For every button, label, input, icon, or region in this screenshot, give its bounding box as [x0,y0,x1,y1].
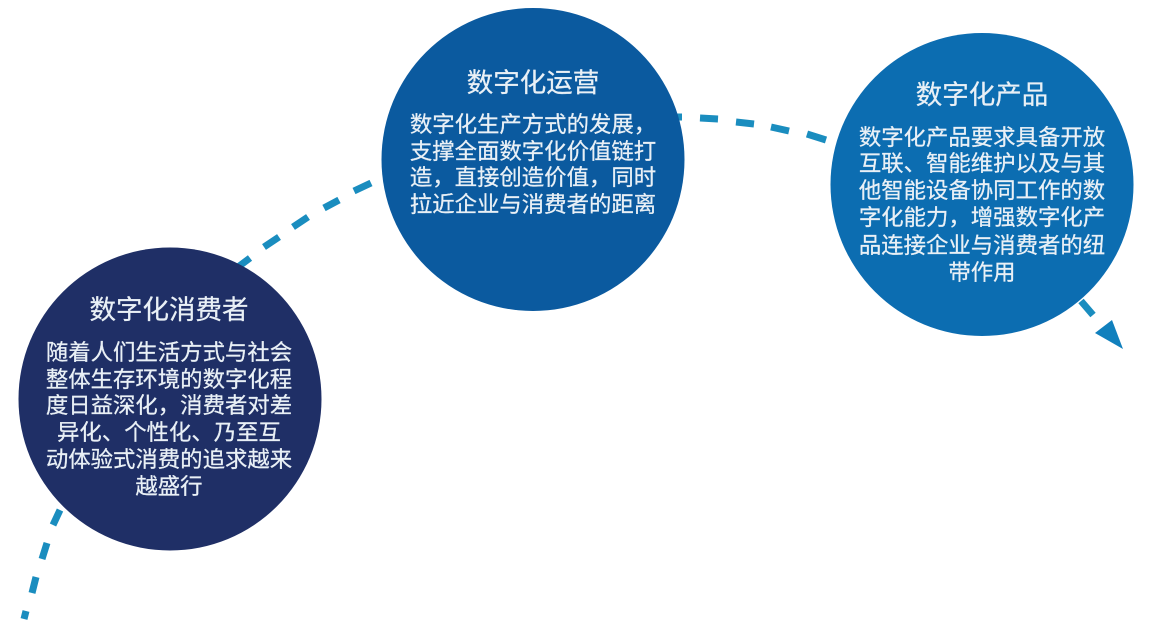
text block: digital consumer description: 异化、个性化、乃至互 [57,420,281,445]
arrow: dashed entry below consumer circle [24,510,60,619]
panel: digital product circle [830,33,1134,336]
text block: digital product description: 数字化产品要求具备开放 [859,125,1105,150]
text block: digital product description: 互联、智能维护以及与其 [859,151,1105,176]
arrow: dashed exit with arrowhead [1081,301,1123,349]
panel: digital operations circle [382,8,684,311]
text block: digital product description: 字化能力，增强数字化产 [859,205,1105,230]
text block: digital consumer description: 越盛行 [135,474,203,499]
text block: digital consumer description: 度日益深化，消费者对差 [46,393,292,418]
text block: digital consumer description: 整体生存环境的数字化程 [46,367,292,392]
text block: digital operations description: 支撑全面数字化价值链打 [410,139,656,164]
text block: digital consumer description [46,340,292,499]
text block: digital operations description: 拉近企业与消费者的距离 [410,192,656,217]
panel: digital consumer circle [18,248,322,550]
text block: digital operations description: 造，直接创造价值，同时 [410,165,656,190]
arrow: dashed link from consumer to operations [238,183,371,267]
text block: digital product description [859,125,1105,285]
heading: digital operations: 数字化运营 [467,68,599,98]
text block: digital consumer description: 动体验式消费的追求越来 [46,447,292,472]
text block: digital product description: 带作用 [948,260,1016,285]
text block: digital consumer description: 随着人们生活方式与社会 [46,340,292,365]
text block: digital operations description [410,112,656,217]
heading: digital product: 数字化产品 [916,80,1048,110]
heading: digital consumer: 数字化消费者 [90,295,248,325]
text block: digital product description: 品连接企业与消费者的纽 [859,233,1105,258]
text block: digital product description: 他智能设备协同工作的数 [859,178,1105,203]
text block: digital operations description: 数字化生产方式的发展， [410,112,656,137]
arrow: dashed link from operations to product [676,117,826,140]
